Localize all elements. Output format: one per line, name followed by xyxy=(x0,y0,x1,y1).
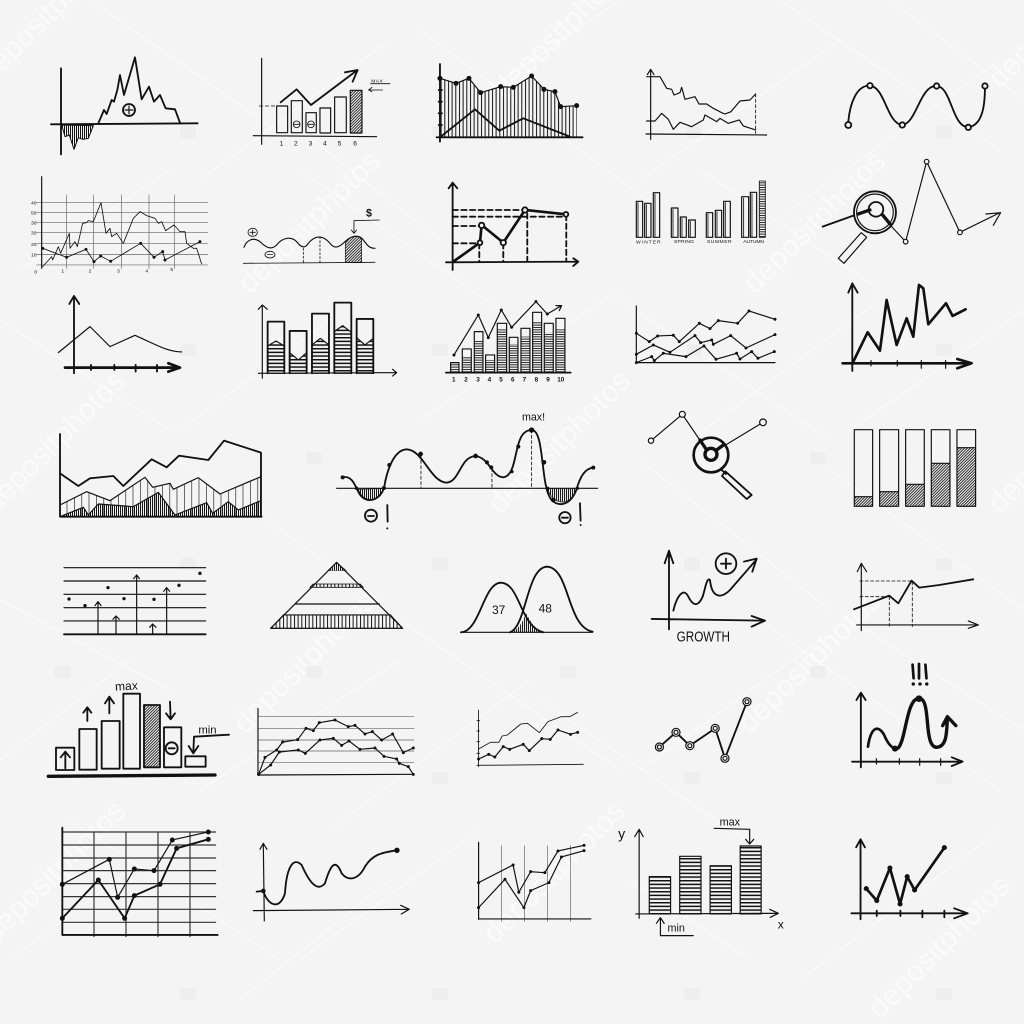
chart: magnifier on connected points xyxy=(648,411,766,499)
chart: two descending lines xyxy=(646,69,767,139)
chart: five progress bars xyxy=(854,430,976,506)
watermark pattern: depositphotos xyxy=(862,870,1017,1024)
axis labels: 30 xyxy=(31,231,37,237)
max label: max xyxy=(115,678,138,694)
min label: min xyxy=(198,724,217,736)
chart: min max hatched bars: x xyxy=(778,917,784,931)
chart: thick rising zigzag xyxy=(851,839,968,919)
minus signs xyxy=(365,503,581,523)
chart: magnifier over line with arrow xyxy=(823,159,1001,263)
max label: max! xyxy=(522,412,545,424)
chart: ruled two line chart xyxy=(258,708,414,775)
chart: three lines with dots xyxy=(636,306,775,363)
chart: dashed line with thick points xyxy=(446,183,578,270)
bar numbers: 8 xyxy=(535,376,539,383)
hatched negative area xyxy=(62,125,93,149)
chart: two bell curves: 48 xyxy=(539,601,552,615)
watermark pattern: depositphotos xyxy=(477,795,632,950)
season labels xyxy=(636,239,764,245)
chart: bar chart with rising arrow xyxy=(253,58,390,147)
chart: max min bars xyxy=(48,678,229,776)
chart: two bell curves xyxy=(461,567,593,632)
axis labels: 50 xyxy=(31,211,37,217)
chart: grid with two jagged lines xyxy=(31,177,208,275)
min callout: min xyxy=(668,923,685,935)
chart: seasonal bars xyxy=(636,181,765,245)
chart: curve on arrow axes xyxy=(253,843,409,921)
axis numbers: 4 xyxy=(323,140,327,147)
chart: thick curve with exclamation marks xyxy=(852,664,963,767)
watermark pattern: depositphotos xyxy=(232,145,387,300)
axis numbers: 6 xyxy=(353,140,357,147)
axis labels: 0 xyxy=(34,269,37,275)
axis numbers: 2 xyxy=(294,140,298,147)
arrow xyxy=(281,70,358,105)
chart: ring point line xyxy=(655,698,751,762)
area outline xyxy=(98,57,180,123)
chart: pyramid xyxy=(271,562,403,628)
axis numbers: 3 xyxy=(309,140,313,147)
dollar sign: $ xyxy=(366,208,372,220)
axis letters: y xyxy=(618,825,626,841)
season labels: WINTER xyxy=(636,239,661,245)
chart: positive negative area line xyxy=(51,57,198,154)
axis labels: 3 xyxy=(117,268,120,274)
bar numbers: 3 xyxy=(476,376,480,383)
watermark pattern: depositphotos xyxy=(482,365,637,520)
season labels: SUMMER xyxy=(707,239,732,245)
bar numbers: 9 xyxy=(546,376,550,383)
max label: MAX xyxy=(371,78,383,84)
lens xyxy=(694,438,728,472)
axis labels: 1 xyxy=(61,268,64,274)
chart: dots and arrows on ruled lines xyxy=(64,568,206,634)
watermark pattern: depositphotos xyxy=(732,585,887,740)
watermark pattern: depositphotos xyxy=(737,145,892,300)
chart: min max hatched bars xyxy=(618,817,784,936)
handle xyxy=(838,233,867,263)
axis labels: 10 xyxy=(31,253,37,259)
season labels: SPRING xyxy=(674,239,694,245)
axis numbers: 5 xyxy=(338,140,342,147)
chart: hatched area with dots xyxy=(437,64,583,142)
chart: wave with max and negative zones xyxy=(337,412,598,529)
axis labels: 5 xyxy=(170,267,173,273)
chart: thick spiky line xyxy=(843,283,972,371)
max callout: max xyxy=(720,817,741,829)
bar numbers: 6 xyxy=(511,376,515,383)
axis labels: 2 xyxy=(89,268,92,274)
data points xyxy=(341,427,595,502)
chart: wave with dollar callout xyxy=(243,208,379,263)
bar numbers: 7 xyxy=(523,376,527,383)
bar numbers: 4 xyxy=(488,376,492,383)
axis numbers xyxy=(280,140,357,147)
chart: growth xyxy=(652,551,765,646)
chart: rising two lines with ticks xyxy=(477,710,583,767)
season labels: AUTUMN xyxy=(743,239,764,245)
axis labels: 30 xyxy=(31,220,37,226)
chart: simple line with arrow axes xyxy=(58,296,182,373)
up and down arrows xyxy=(61,697,229,768)
bar numbers: 10 xyxy=(557,376,565,383)
chart: grid with two rising lines xyxy=(62,828,218,937)
lens xyxy=(854,191,896,233)
chart: column ruled two lines xyxy=(479,842,591,922)
chart: wave with hollow points xyxy=(845,83,988,130)
bell values: 37 xyxy=(492,603,506,617)
exclamation marks xyxy=(913,664,926,678)
plus sign xyxy=(716,553,736,574)
axis labels: 40 xyxy=(31,201,37,207)
handle xyxy=(722,470,752,499)
chart: bars with hatched lower parts xyxy=(258,303,397,378)
axis numbers: 1 xyxy=(280,140,284,147)
bar numbers xyxy=(452,376,565,383)
chart: line with dashed guides xyxy=(854,563,978,631)
watermark pattern: depositphotos xyxy=(227,585,382,740)
bar numbers: 5 xyxy=(499,376,503,383)
bar numbers: 2 xyxy=(464,376,468,383)
axis labels xyxy=(31,201,173,275)
plus sign xyxy=(123,104,135,116)
axis labels: 20 xyxy=(31,242,37,248)
bar numbers: 1 xyxy=(452,376,456,383)
axis labels: 4 xyxy=(145,268,148,274)
chart: numbered bars with line xyxy=(446,302,571,383)
growth label: GROWTH xyxy=(677,630,730,646)
chart: layered hatched area xyxy=(60,434,262,517)
